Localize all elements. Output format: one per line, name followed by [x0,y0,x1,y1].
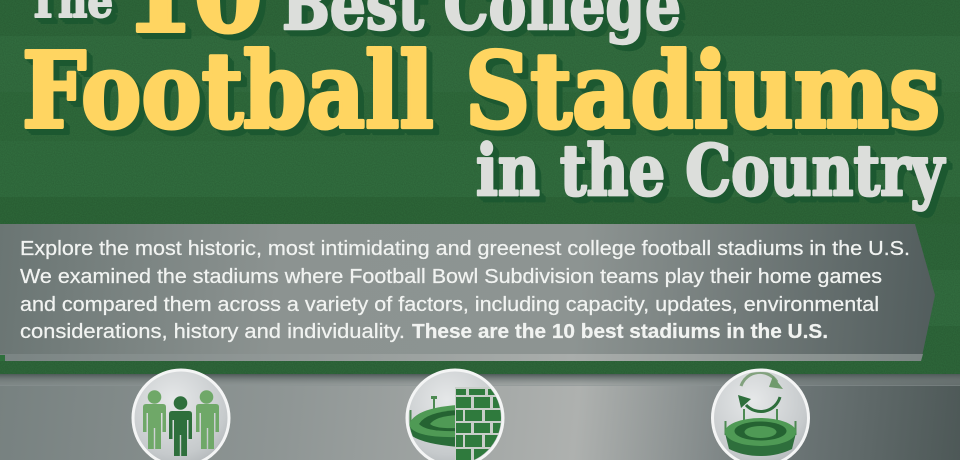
brick wall [455,387,505,460]
stadium [724,409,796,456]
lower grey panel [0,374,960,460]
person center [169,396,192,456]
recycling arrows [738,372,783,412]
intro banner [0,224,935,361]
intro paragraph: These are the 10 best stadiums in the U.S. [412,321,828,343]
icon: recycling arrows over stadium [712,370,808,460]
icon: stadium and brick wall [407,370,505,460]
title [22,0,946,212]
icon: people [133,370,229,460]
banner shape [0,224,935,361]
person left [143,390,166,449]
person right [196,390,219,449]
intro paragraph: and compared them across a variety of factors, including capacity, updates, environmental [20,294,879,316]
intro paragraph: Explore the most historic, most intimidating and greenest college football stadiums in the U.S. [20,238,910,260]
intro paragraph: considerations, history and individuality. [20,321,405,343]
intro paragraph [20,238,910,343]
stadium half [409,396,458,447]
intro paragraph: We examined the stadiums where Football Bowl Subdivision teams play their home games [20,266,882,288]
